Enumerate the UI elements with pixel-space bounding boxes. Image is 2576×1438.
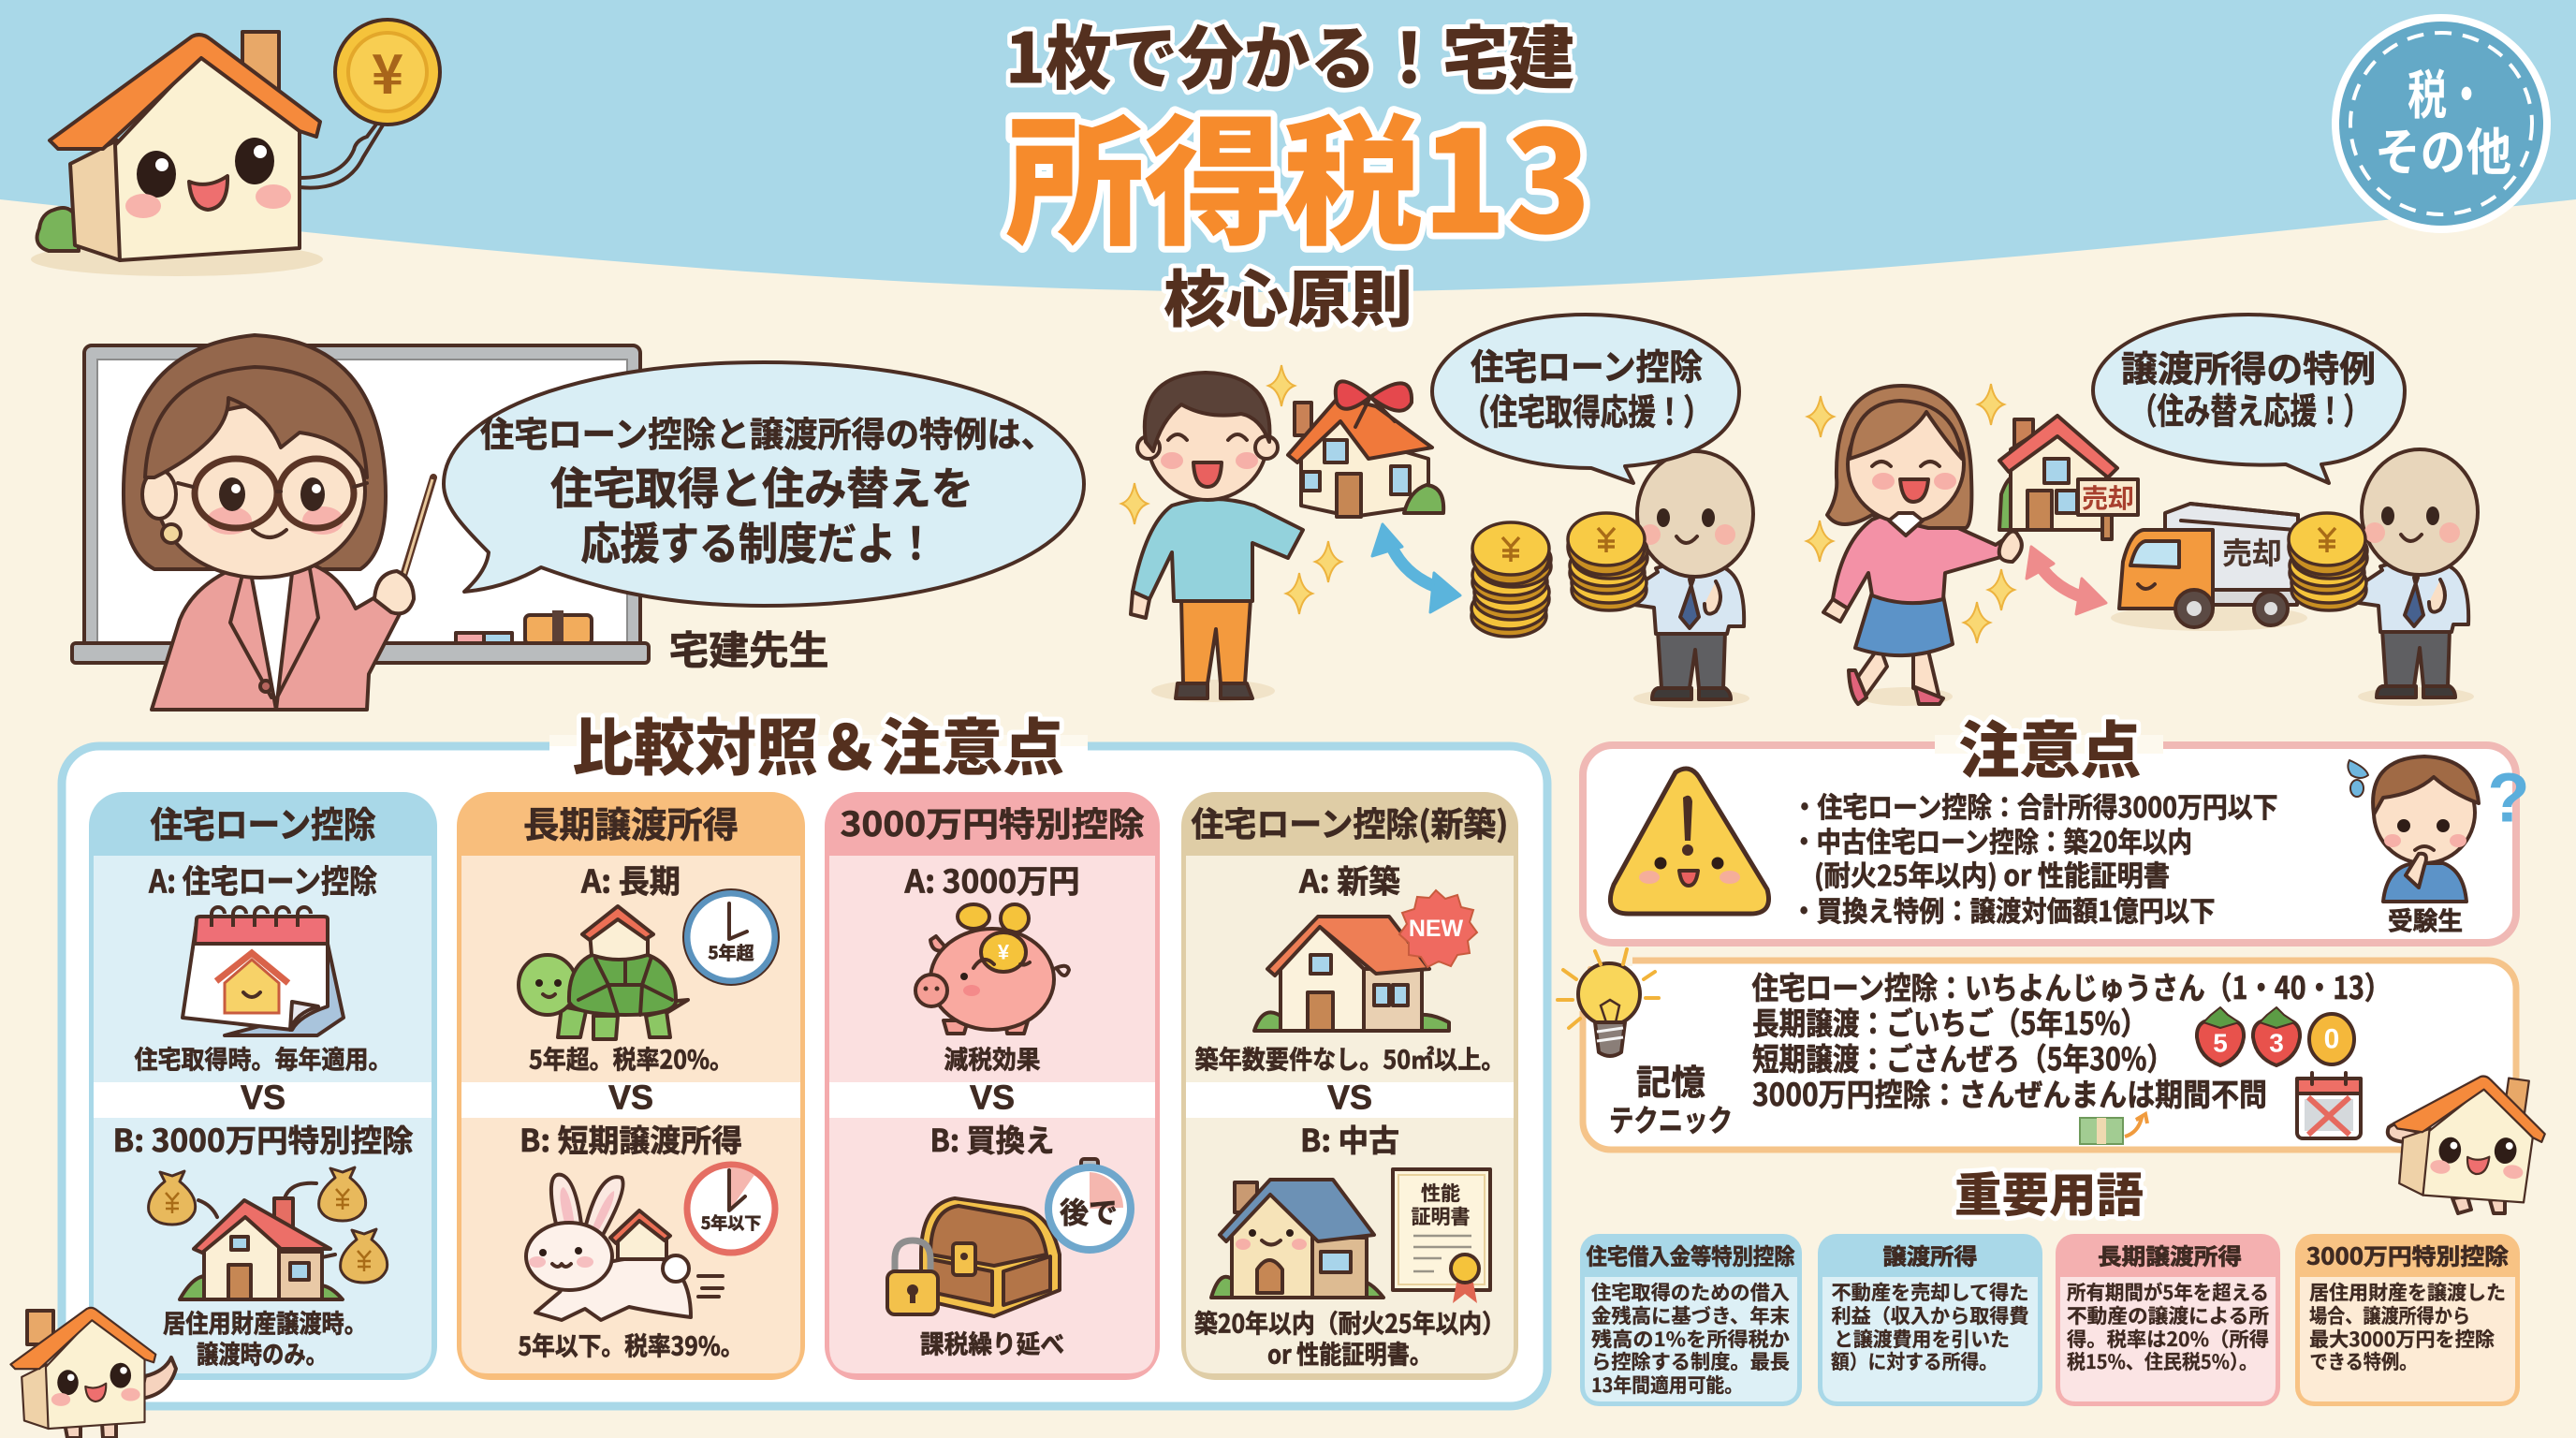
panel: caution [1583, 701, 2530, 943]
heading: 核心原則: 核心原則 [1164, 250, 1412, 340]
icon: clock 5年超: 5年超 [708, 940, 754, 964]
term card: 長期譲渡所得: 得。税率は20%（所得 [2067, 1325, 2269, 1353]
card 2: 長期譲渡所得: 長期譲渡所得 [523, 796, 739, 848]
mascot: small waving house bottom left [10, 1308, 176, 1438]
icon: old house [1211, 1180, 1383, 1298]
icon: piggy bank: ¥ [998, 940, 1010, 964]
term card: 譲渡所得: 譲渡所得 [1883, 1238, 1977, 1271]
heading: 注意点: 注意点 [1958, 701, 2142, 791]
icon: new house: NEW [1409, 916, 1464, 942]
card 1: 住宅ローン控除: VS [241, 1078, 285, 1116]
icon: crossed calendar [2297, 1073, 2361, 1138]
mascot: house with yen coin balloon: ¥ [372, 31, 403, 110]
icon: clock 5年以下 [687, 1165, 775, 1253]
label: 記憶テクニック: テクニック [1609, 1097, 1733, 1140]
term card: 譲渡所得: 利益（収入から取得費 [1831, 1301, 2029, 1329]
term card: 住宅借入金等特別控除: 残高の1%を所得税か [1591, 1325, 1790, 1353]
badge: 税・その他: 税・ [2408, 54, 2486, 129]
term card: 長期譲渡所得: 長期譲渡所得 [2098, 1238, 2242, 1271]
icon: clock 5年超 [683, 889, 779, 985]
text: caution bullets: ・住宅ローン控除：合計所得3000万円以下 [1792, 785, 2278, 826]
panel: comparison [62, 698, 1547, 1406]
speech bubble: teacher [444, 362, 1084, 606]
speech bubble: 譲渡所得の特例: （住み替え応援！） [2130, 382, 2370, 434]
term card: 住宅借入金等特別控除: ら控除する制度。最長 [1591, 1347, 1790, 1375]
icon: turtle carrying house [519, 906, 688, 1039]
text: caution bullets [1792, 785, 2278, 930]
character: worried student: ? [2487, 758, 2530, 837]
character: tax officer 1 [1628, 451, 1753, 708]
title: 1枚で分かる！宅建: 1枚で分かる！宅建 [1005, 4, 1574, 103]
term card: 譲渡所得: 不動産を売却して得た [1831, 1278, 2029, 1306]
heading: 重要用語: 重要用語 [1954, 1158, 2144, 1225]
speech bubble: 住宅ローン控除: 住宅ローン控除 [1471, 339, 1703, 389]
label: 記憶テクニック [1609, 1054, 1733, 1140]
icon: house for sale [1999, 416, 2138, 539]
term card: 3000万円特別控除: 居住用財産を譲渡した [2309, 1278, 2506, 1306]
term card: 住宅借入金等特別控除: 住宅取得のための借入 [1591, 1278, 1790, 1306]
speech bubble: 住宅ローン控除 [1432, 315, 1739, 483]
character: happy woman [1823, 386, 2022, 706]
icon: moving truck [2111, 504, 2307, 631]
icon: moving truck: 売却 [2222, 530, 2282, 573]
icon: strawberries and coin 5 3 0: 5 [2213, 1028, 2228, 1058]
speech bubble: teacher: 応援する制度だよ！ [580, 507, 936, 573]
icon: house with red ribbon [1288, 381, 1443, 517]
term card: 3000万円特別控除: 場合、譲渡所得から [2309, 1301, 2470, 1329]
icon: strawberries and coin 5 3 0: 3 [2269, 1028, 2284, 1058]
text: caution bullets: (耐火25年以内) or 性能証明書 [1814, 853, 2170, 894]
card 2: 長期譲渡所得: VS [608, 1078, 653, 1116]
text: caution bullets: ・中古住宅ローン控除：築20年以内 [1792, 819, 2192, 860]
label: 記憶テクニック: 記憶 [1636, 1054, 1705, 1105]
term card: 譲渡所得 [1818, 1234, 2042, 1406]
card 2: 長期譲渡所得: A: 長期 [580, 856, 681, 902]
character: tax officer 2 [2352, 449, 2478, 706]
text: mnemonics [1752, 963, 2391, 1115]
card 2: 長期譲渡所得: 5年超。税率20%。 [529, 1039, 733, 1077]
card 3: 3000万円特別控除: A: 3000万円 [904, 856, 1080, 902]
badge: 税・その他 [2332, 14, 2551, 233]
character: worried student [2348, 756, 2530, 902]
title: 所得税13: 所得税13 [1005, 71, 1591, 273]
icon: light bulb [1558, 949, 1659, 1056]
icon: money with arrow [2080, 1114, 2147, 1144]
icon: coin stack held [1568, 513, 1647, 610]
card 1: 住宅ローン控除 [89, 792, 437, 1380]
term card: 譲渡所得: 額）に対する所得。 [1831, 1347, 1998, 1375]
term card: 住宅借入金等特別控除: 住宅借入金等特別控除 [1586, 1238, 1795, 1271]
panel: memory technique [1558, 949, 2516, 1150]
character: happy boy holding house [1131, 373, 1303, 702]
card 2: 長期譲渡所得 [457, 792, 805, 1380]
icon: coin stack [1471, 522, 1551, 637]
mascot: small house right [2384, 1063, 2552, 1213]
card 2: 長期譲渡所得: 5年以下。税率39%。 [519, 1326, 743, 1363]
icon: warning triangle [1610, 769, 1769, 914]
icon: stopwatch 後で: 後で [1060, 1189, 1118, 1232]
card 3: 3000万円特別控除 [825, 792, 1160, 1380]
card 3: 3000万円特別控除: B: 買換え [930, 1116, 1054, 1161]
term card: 3000万円特別控除: 最大3000万円を控除 [2309, 1325, 2495, 1353]
text: mnemonics: 短期譲渡：ごさんぜろ（5年30%） [1752, 1034, 2174, 1079]
card 1: 住宅ローン控除: B: 3000万円特別控除 [112, 1116, 414, 1161]
card 4: 住宅ローン控除(新築): 築20年以内（耐火25年以内） [1194, 1303, 1505, 1341]
card 1: 住宅ローン控除: A: 住宅ローン控除 [148, 856, 377, 902]
text: mnemonics: 長期譲渡：ごいちご（5年15%） [1752, 999, 2147, 1044]
text: mnemonics: 住宅ローン控除：いちよんじゅうさん（1・40・13） [1752, 963, 2391, 1008]
term card: 長期譲渡所得: 税15%、住民税5%）。 [2067, 1347, 2258, 1375]
card 1: 住宅ローン控除: 住宅ローン控除 [150, 796, 376, 848]
card 3: 3000万円特別控除: VS [970, 1078, 1015, 1116]
icon: strawberries and coin 5 3 0: 0 [2324, 1024, 2339, 1054]
card 3: 3000万円特別控除: 課税繰り延べ [920, 1324, 1064, 1361]
term card: 住宅借入金等特別控除 [1580, 1234, 1802, 1406]
background: sky blue header wave [0, 0, 2576, 292]
whiteboard [72, 345, 649, 663]
icon: performance certificate: 証明書 [1412, 1202, 1470, 1230]
card 4: 住宅ローン控除(新築): A: 新築 [1298, 856, 1400, 902]
card 1: 住宅ローン控除: 譲渡時のみ。 [197, 1335, 328, 1371]
term card: 3000万円特別控除: できる特例。 [2310, 1347, 2417, 1375]
term card: 3000万円特別控除 [2295, 1234, 2520, 1406]
speech bubble: 譲渡所得の特例 [2093, 315, 2405, 483]
icon: piggy bank [915, 904, 1069, 1034]
card 4: 住宅ローン控除(新築): B: 中古 [1300, 1116, 1399, 1161]
card 4: 住宅ローン控除(新築) [1181, 792, 1518, 1380]
icon: performance certificate [1393, 1169, 1490, 1303]
arrow: blue double arrow [1372, 524, 1460, 612]
icon: rabbit carrying house [526, 1175, 723, 1320]
card 4: 住宅ローン控除(新築): VS [1327, 1078, 1372, 1116]
icon: strawberries and coin 5 3 0 [2197, 1007, 2354, 1065]
icon: clock 5年以下: 5年以下 [701, 1211, 761, 1235]
icon: new house [1254, 890, 1477, 1031]
heading: 比較対照＆注意点: 比較対照＆注意点 [572, 698, 1064, 788]
card 4: 住宅ローン控除(新築): 築年数要件なし。50㎡以上。 [1194, 1039, 1505, 1077]
label: 受験生: 受験生 [2388, 901, 2463, 938]
arrow: pink double arrow [2027, 547, 2106, 614]
icon: treasure chest with padlock [887, 1198, 1060, 1316]
icon: calendar with house [183, 907, 344, 1035]
text: caution bullets: ・買換え特例：譲渡対価額1億円以下 [1792, 888, 2215, 930]
icon: coin stack held 2 [2289, 513, 2367, 610]
speech bubble: teacher: 住宅ローン控除と譲渡所得の特例は、 [480, 406, 1055, 457]
character: teacher [124, 335, 433, 710]
card 1: 住宅ローン控除: 居住用財産譲渡時。 [163, 1303, 367, 1341]
icon: stopwatch 後で [1048, 1159, 1131, 1250]
label: 宅建先生: 宅建先生 [668, 620, 829, 676]
card 4: 住宅ローン控除(新築): or 性能証明書。 [1267, 1335, 1432, 1371]
icon: performance certificate: 性能 [1421, 1179, 1460, 1207]
speech bubble: 住宅ローン控除: （住宅取得応援！） [1462, 384, 1711, 434]
term card: 長期譲渡所得: 不動産の譲渡による所 [2067, 1301, 2269, 1329]
sparkles [1121, 365, 2014, 643]
badge: 税・その他: その他 [2375, 110, 2511, 185]
card 4: 住宅ローン控除(新築): 住宅ローン控除(新築) [1191, 798, 1509, 846]
card 3: 3000万円特別控除: 3000万円特別控除 [841, 798, 1144, 846]
term card: 譲渡所得: と譲渡費用を引いた [1834, 1325, 2010, 1353]
term card: 長期譲渡所得 [2056, 1234, 2280, 1406]
speech bubble: 譲渡所得の特例: 譲渡所得の特例 [2121, 341, 2376, 391]
term card: 長期譲渡所得: 所有期間が5年を超える [2067, 1278, 2269, 1306]
card 1: 住宅ローン控除: 住宅取得時。毎年適用。 [135, 1039, 391, 1077]
term card: 3000万円特別控除: 3000万円特別控除 [2306, 1238, 2509, 1271]
speech bubble: teacher: 住宅取得と住み替えを [550, 453, 973, 517]
icon: house with money bags [149, 1167, 388, 1299]
icon: house for sale: 売却 [2082, 478, 2134, 516]
term card: 住宅借入金等特別控除: 金残高に基づき、年末 [1591, 1301, 1790, 1329]
card 2: 長期譲渡所得: B: 短期譲渡所得 [520, 1116, 742, 1161]
card 3: 3000万円特別控除: 減税効果 [944, 1039, 1041, 1077]
term card: 住宅借入金等特別控除: 13年間適用可能。 [1591, 1371, 1743, 1399]
text: mnemonics: 3000万円控除：さんぜんまんは期間不問 [1752, 1070, 2267, 1115]
mascot: house with yen coin balloon [31, 20, 440, 276]
